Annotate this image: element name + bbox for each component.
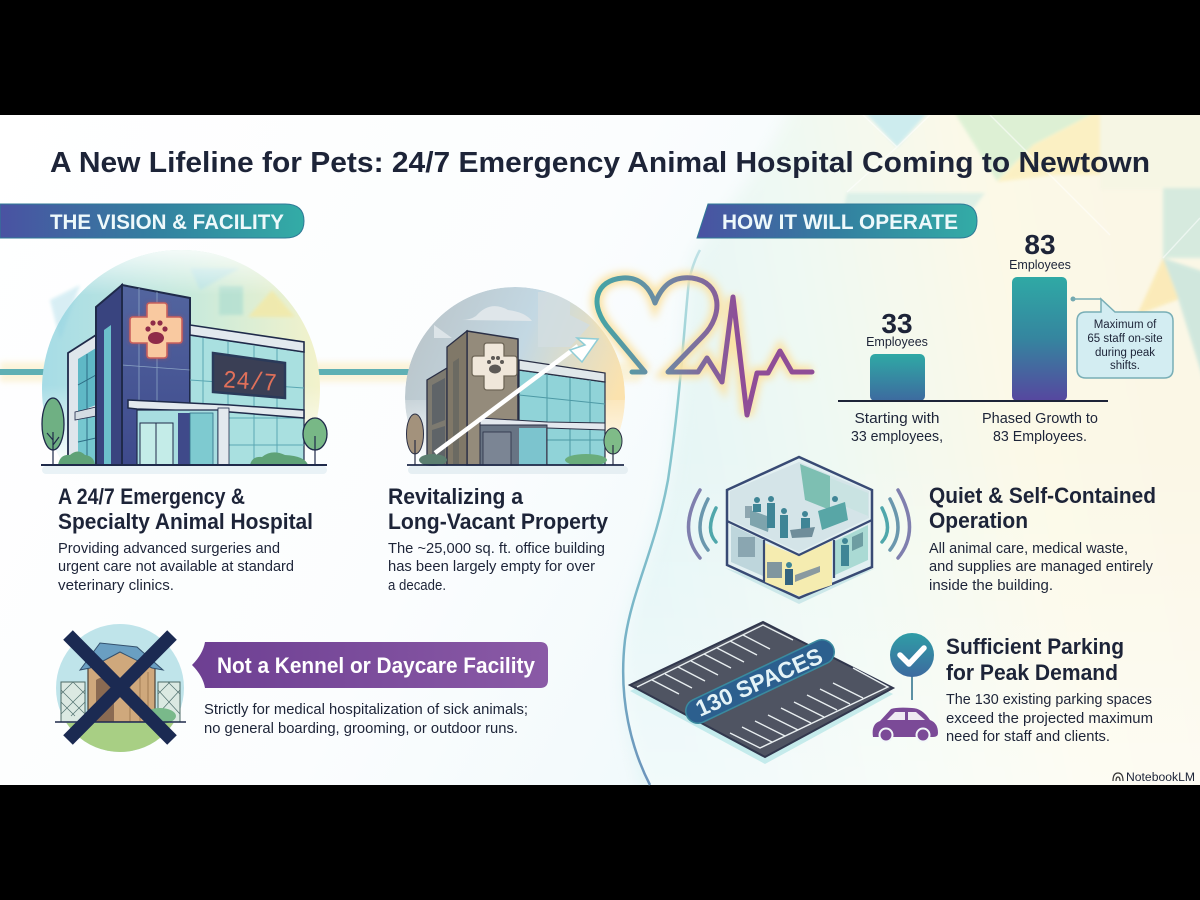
icon: sound waves xyxy=(688,490,910,558)
icon: parking lot 130 spaces: 130 SPACES xyxy=(692,642,826,722)
icon: revitalized building xyxy=(405,287,628,474)
text block: kennel description xyxy=(204,702,528,737)
callout: maximum staff: shifts. xyxy=(1110,360,1140,372)
text block: quiet operation: and supplies are managed entirely xyxy=(929,559,1154,575)
text block: sufficient parking: Sufficient Parking xyxy=(946,634,1124,659)
chart: employee growth: 83 Employees. xyxy=(993,428,1087,445)
text block: quiet operation: inside the building. xyxy=(929,578,1053,594)
arrow: transformation xyxy=(435,338,598,453)
text block: sufficient parking: exceed the projected maximum xyxy=(946,711,1153,727)
bar: 33 employees: 33 xyxy=(881,308,913,339)
icon: check pin and car xyxy=(873,633,938,742)
text block: revitalizing: The ~25,000 sq. ft. office building xyxy=(388,541,605,557)
heading: the vision and facility: THE VISION & FACILITY xyxy=(50,210,284,234)
callout: maximum staff: during peak xyxy=(1095,347,1155,359)
chart: employee growth: Phased Growth to xyxy=(982,410,1098,427)
icon: paw cross xyxy=(130,303,182,358)
text block: 24/7 hospital xyxy=(58,484,313,594)
text block: sufficient parking xyxy=(946,634,1153,745)
chart: employee growth xyxy=(838,229,1108,445)
background panel xyxy=(0,115,1200,786)
bar: 83 employees xyxy=(1009,229,1071,401)
text block: revitalizing: Revitalizing a xyxy=(388,484,523,509)
text block: 24/7 hospital: urgent care not available at standard xyxy=(58,559,294,575)
chart: employee growth: 33 employees, xyxy=(851,428,943,445)
heading: how it will operate xyxy=(697,204,977,238)
callout: maximum staff: Maximum of xyxy=(1094,319,1157,331)
staff figures and equipment xyxy=(738,496,863,585)
text block: revitalizing: a decade. xyxy=(388,578,446,594)
sign: 24/7 display: 24/7 xyxy=(222,366,278,399)
heading: the vision and facility xyxy=(0,204,304,238)
text block: 24/7 hospital: Specialty Animal Hospital xyxy=(58,509,313,534)
text block: 24/7 hospital: Providing advanced surgeries and xyxy=(58,541,280,557)
text block: kennel description: no general boarding, grooming, or outdoor runs. xyxy=(204,721,518,737)
icon: new hospital building xyxy=(41,250,328,474)
text block: revitalizing xyxy=(388,484,608,594)
text block: revitalizing: has been largely empty for over xyxy=(388,559,595,575)
cross mark xyxy=(68,635,172,740)
chart: heartbeat heart line xyxy=(597,278,812,415)
sign: 24/7 display xyxy=(213,353,285,399)
text block: kennel description: Strictly for medical hospitalization of sick animals; xyxy=(204,702,528,718)
icon: paw cross xyxy=(472,343,517,390)
canopy xyxy=(128,400,304,418)
callout: maximum staff: 65 staff on-site xyxy=(1087,333,1163,345)
text block: sufficient parking: for Peak Demand xyxy=(946,660,1118,685)
callout: not a kennel xyxy=(192,642,548,688)
callout: not a kennel: Not a Kennel or Daycare Facility xyxy=(217,653,535,678)
heading: how it will operate: HOW IT WILL OPERATE xyxy=(722,210,958,234)
icon: quiet building with sound waves xyxy=(688,457,910,604)
icon: crossed-out kennel xyxy=(52,624,188,760)
text block: 24/7 hospital: veterinary clinics. xyxy=(58,578,174,594)
text block: quiet operation: Operation xyxy=(929,508,1028,533)
icon: parking lot 130 spaces xyxy=(630,622,893,764)
watermark: NotebookLM: NotebookLM xyxy=(1126,772,1195,784)
bar: 83 employees: 83 xyxy=(1024,229,1056,260)
bar: 33 employees xyxy=(866,308,928,401)
title: A New Lifeline for Pets: 24/7 Emergency Animal Hospital Coming to Newtown xyxy=(50,147,1150,179)
text block: 24/7 hospital: A 24/7 Emergency & xyxy=(58,484,245,509)
bar: 33 employees: Employees xyxy=(866,335,928,349)
text block: sufficient parking: The 130 existing parking spaces xyxy=(946,692,1152,708)
text block: quiet operation: All animal care, medical waste, xyxy=(929,541,1128,557)
text block: quiet operation: Quiet & Self-Contained xyxy=(929,483,1156,508)
text block: revitalizing: Long-Vacant Property xyxy=(388,509,608,534)
bar: 83 employees: Employees xyxy=(1009,258,1071,272)
text block: sufficient parking: need for staff and clients. xyxy=(946,729,1110,745)
callout: maximum staff xyxy=(1070,296,1173,378)
text block: quiet operation xyxy=(929,483,1156,594)
lifeline horizontal band xyxy=(0,362,640,382)
chart: employee growth: Starting with xyxy=(854,410,940,427)
trees and shrubs xyxy=(42,398,64,450)
